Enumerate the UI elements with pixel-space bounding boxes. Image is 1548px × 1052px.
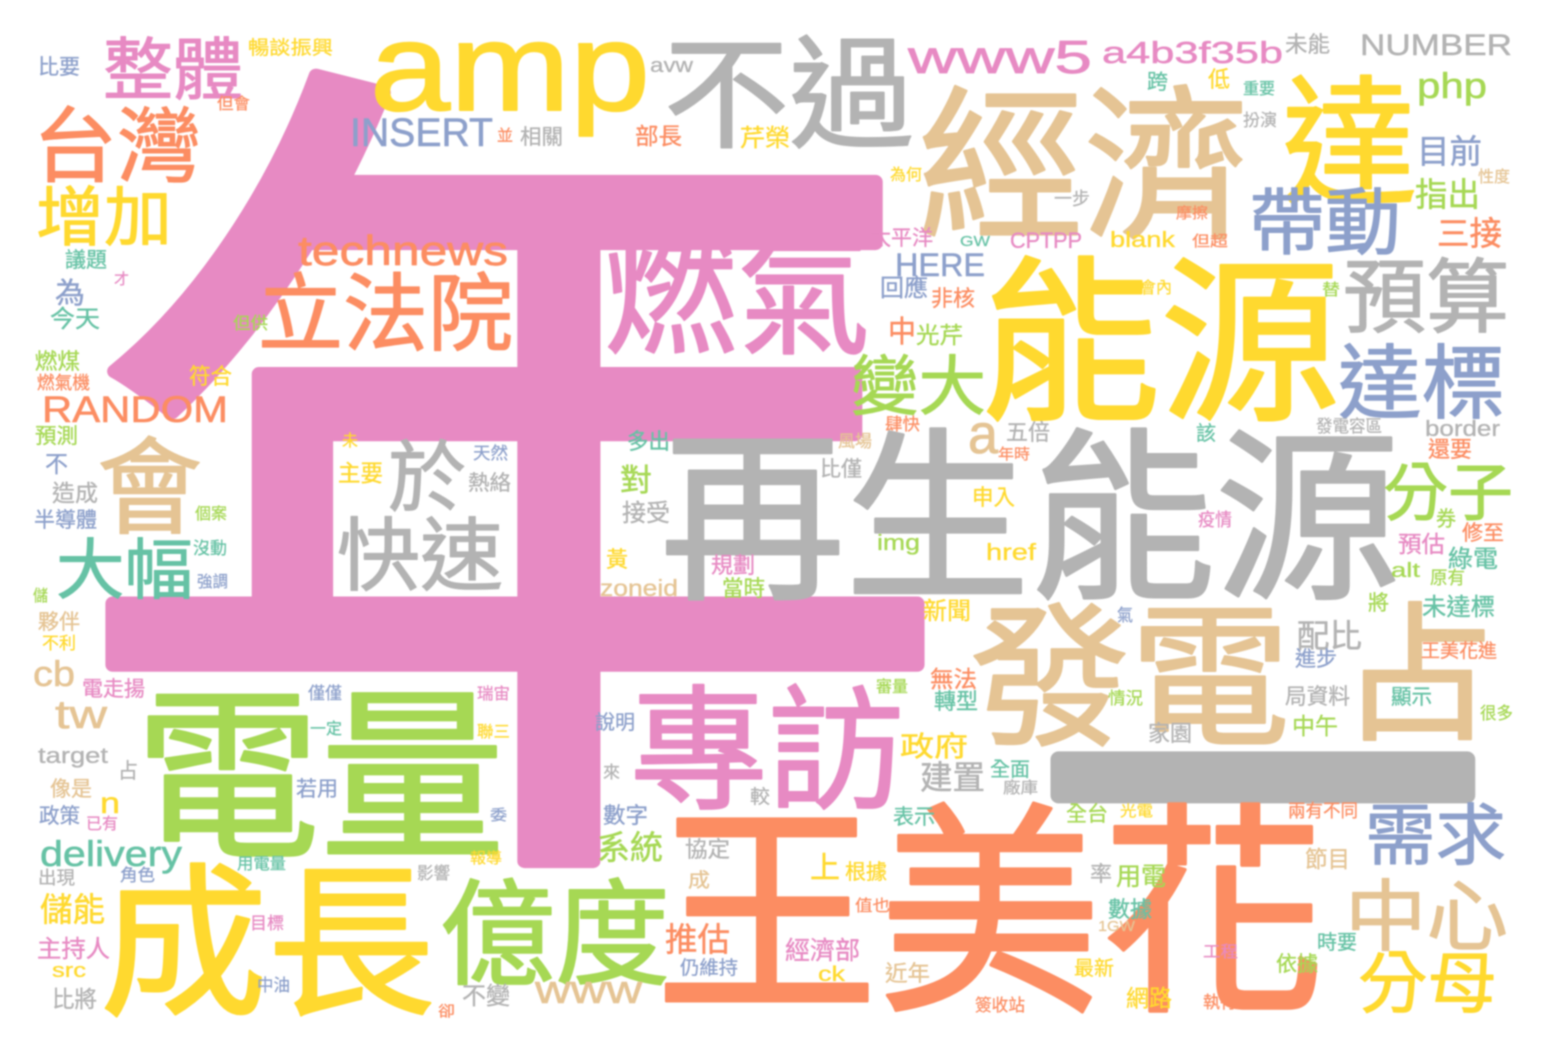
small words: top right: 低 [1208, 67, 1230, 92]
small words: centre bottom: 瑞宙 [477, 685, 510, 703]
small words: inside 年 counters: 接受 [622, 500, 670, 527]
small words: centre upper: 太平洋 [870, 227, 933, 250]
small words: left lower column: 出現 [38, 868, 75, 888]
small words: bottom right: 率 [1090, 863, 1112, 886]
small words: left lower column: 主持人 [37, 936, 110, 963]
small words: bottom right: 值也 [855, 897, 890, 915]
word: www: www [534, 968, 642, 1012]
small words: left middle column: 不利 [42, 634, 76, 653]
small words: top right: 三接 [1437, 215, 1502, 252]
small words: centre upper: 並 [497, 127, 513, 145]
small words: centre upper: 部長 [635, 123, 682, 149]
small words: centre right: 政府 [900, 731, 968, 762]
small words: inside 年 counters: 未 [342, 432, 358, 450]
small words: left upper column: 為 [55, 277, 85, 310]
word: 分母: 分母 [1358, 947, 1497, 1022]
small words: left lower column [37, 743, 290, 1012]
small words: inside 年 counters: 對 [620, 463, 652, 498]
small words: left upper column: 符合 [189, 364, 232, 389]
word: technews: technews [298, 227, 508, 274]
small words: centre upper: avw [650, 55, 694, 77]
small words: left middle column: 夥伴 [38, 611, 80, 634]
small words: top right: 重要 [1243, 80, 1275, 98]
small words: right column: 配比 [1297, 618, 1362, 654]
small words: centre upper: 為何 [890, 166, 922, 184]
small words: right column: 很多 [1480, 704, 1513, 723]
small words: right column: 王美花進 [1421, 640, 1497, 662]
word: 變大: 變大 [851, 350, 986, 423]
small words: left middle column: cb [33, 653, 75, 694]
small words: left upper column: 議題 [65, 249, 107, 272]
small words: centre upper: GW [960, 233, 991, 250]
giant word: 年: 年 [70, 25, 958, 974]
small words: bottom right: 工程 [1203, 943, 1238, 961]
small words: bottom right: 表示 [893, 806, 935, 829]
small words: bottom right: 1GW [1098, 918, 1136, 935]
small words: inside 年 counters: 規劃 [711, 553, 755, 578]
small words: left middle column: 強調 [197, 573, 228, 591]
small words: centre right: 情況 [1108, 689, 1143, 708]
small words: centre right: 五倍 [1006, 420, 1050, 445]
small words: right column: 未達標 [1422, 594, 1495, 621]
word: 占: 占 [1340, 592, 1495, 760]
small words: left middle column: 電走揚 [82, 678, 145, 701]
small words: top right: 目前 [1417, 133, 1482, 170]
word: 會: 會 [97, 431, 202, 548]
small words: top right: 未能 [1285, 32, 1330, 57]
small words: centre right: 轉型 [934, 689, 978, 714]
small words: top right: blank [1110, 227, 1176, 252]
small words: centre upper [497, 55, 1090, 349]
small words: left lower column: n [100, 787, 120, 820]
small words: centre upper: 相關 [520, 126, 563, 149]
small words: right column: 原有 [1430, 568, 1465, 588]
small words: centre right [820, 415, 1232, 797]
word: 專訪: 專訪 [630, 676, 905, 827]
small words: right column: 預估 [1398, 531, 1445, 557]
word: 達標: 達標 [1338, 340, 1505, 430]
small words: right column: 發電容區 [1316, 417, 1382, 436]
small words: left lower column: 儲能 [40, 891, 105, 928]
small words: centre right: 風場 [838, 432, 872, 451]
small words: bottom right: 經濟部 [785, 937, 860, 965]
small words: centre right: 無法 [930, 666, 977, 692]
word: a: a [968, 402, 999, 465]
small words: inside 年 counters [338, 429, 765, 601]
small words: centre right: 年時 [998, 446, 1030, 463]
small words: left lower column: target [38, 743, 108, 768]
small words: centre right: 建置 [920, 759, 985, 796]
small words: left upper column: 但供 [233, 314, 268, 333]
small words: inside 年 counters: zoneid [600, 575, 678, 601]
small words: bottom right: 根據 [845, 861, 887, 884]
small words: left middle column: 個案 [195, 505, 227, 523]
word: 成長: 成長 [100, 853, 435, 1037]
small words: right column: 修至 [1462, 522, 1504, 545]
small words: left upper column: 燃氣機 [37, 373, 90, 393]
small words: left upper column: 暢談振興 [248, 37, 333, 59]
small words: centre upper: 回應 [880, 275, 928, 302]
small words: inside 年 counters: 熱絡 [468, 472, 511, 495]
word: 王美花: 王美花 [655, 789, 1325, 1041]
small words: bottom right: 上 [810, 852, 840, 885]
word: 需求: 需求 [1365, 799, 1506, 874]
small words: bottom right: 兩有不同 [1288, 801, 1358, 821]
small words: bottom right: ck [818, 963, 846, 986]
small words: centre upper: 中 [888, 316, 916, 349]
small words: centre right: 疫情 [1198, 510, 1232, 530]
small words: bottom right: 依據 [1276, 953, 1318, 976]
small words: top right: 會內 [1140, 279, 1172, 297]
small words: top right: 但超 [1192, 233, 1228, 250]
word: 大幅: 大幅 [56, 533, 193, 607]
small words: centre bottom: 較 [750, 786, 770, 808]
small words: centre upper: HERE [895, 247, 985, 283]
small words: inside 年 counters: 當時 [722, 576, 765, 601]
small words: bottom right: 網路 [1126, 985, 1172, 1011]
small words: centre bottom: 數字 [603, 803, 648, 828]
small words: centre right: 審量 [876, 678, 908, 696]
small words: bottom right: 近年 [885, 961, 930, 986]
small words: left lower column: 比將 [52, 986, 97, 1012]
small words: left lower column: src [52, 960, 86, 982]
small words: centre right: 比僅 [820, 458, 862, 481]
small words: bottom right: 光電 [1120, 803, 1153, 820]
small words: inside 年 counters: 天然 [473, 444, 508, 463]
small words: centre upper: 一步 [1054, 189, 1090, 209]
small words: bottom right: 全台 [1066, 803, 1108, 826]
small words: centre right: 氣 [1117, 606, 1133, 625]
word: www5: www5 [907, 31, 1092, 83]
small words: centre upper: 非核 [931, 286, 975, 311]
small words: centre bottom: 仍維持 [680, 957, 738, 979]
small words: centre bottom: 說明 [595, 711, 635, 734]
small words: right column: 券 [1436, 508, 1456, 531]
word: 台灣: 台灣 [33, 102, 201, 193]
word: 電量: 電量 [135, 677, 505, 883]
word: 億度: 億度 [440, 872, 670, 1000]
small words: centre bottom: 若用 [296, 778, 338, 801]
small words: top right: 指出 [1415, 176, 1480, 213]
small words: centre bottom: 報導 [470, 850, 502, 867]
small words: bottom right: 執行 [1203, 993, 1237, 1012]
word: 分子: 分子 [1383, 459, 1513, 529]
small words: centre upper: CPTPP [1010, 228, 1082, 253]
small words: centre bottom: 來 [603, 763, 620, 782]
word: 發電: 發電 [970, 593, 1290, 766]
small words: bottom right: 簽收站 [975, 995, 1025, 1015]
small words: bottom right: 最新 [1074, 957, 1114, 980]
word: 立法院: 立法院 [258, 268, 513, 363]
word: 增加: 增加 [36, 181, 172, 254]
word: 再生能源: 再生能源 [660, 418, 1400, 624]
small words: centre right: 申入 [972, 485, 1015, 510]
small words: left lower column: 中油 [257, 976, 290, 995]
small words: centre bottom: 影響 [417, 864, 450, 883]
small words: centre right: 肆快 [885, 415, 920, 434]
small words: left upper column: 但會 [217, 95, 250, 113]
small words: right column: border [1425, 416, 1500, 441]
small words: right column: 中午 [1292, 713, 1338, 739]
small words: centre right: href [986, 539, 1037, 565]
small words: left lower column: 政策 [39, 805, 80, 828]
word: 帶動: 帶動 [1249, 183, 1401, 264]
word: amp: amp [370, 0, 650, 137]
small words: left middle column: 沒動 [193, 539, 227, 558]
small words: right column: 局資料 [1285, 684, 1350, 709]
word: 經濟: 經濟 [918, 76, 1250, 260]
small words: left middle column: 造成 [52, 480, 98, 506]
small words: right column [1148, 416, 1513, 746]
small words: top right: 跨 [1147, 71, 1168, 94]
word: 預算: 預算 [1343, 254, 1509, 344]
small words: right column: 將 [1368, 592, 1389, 615]
small words: left lower column: 已有 [86, 815, 118, 833]
small words: centre bottom: 一定 [310, 720, 342, 738]
small words: right column: 家園 [1148, 721, 1192, 746]
word: 不過: 不過 [664, 28, 914, 164]
small words: left middle column [33, 425, 228, 737]
small words: top right: php [1417, 65, 1487, 106]
small words: left lower column: 像是 [50, 778, 92, 801]
small words: centre bottom: 僅僅 [308, 684, 342, 703]
small words: left middle column: 儲 [33, 587, 48, 605]
small words: top right: 摩擦 [1176, 204, 1208, 222]
small words: left upper column: 燃煤 [35, 349, 80, 374]
word: delivery: delivery [40, 833, 182, 874]
small words: left upper column [35, 37, 333, 393]
small words: bottom right: 時要 [1317, 931, 1357, 954]
small words: centre upper: 光芹 [916, 322, 963, 348]
small words: left middle column: 預測 [35, 425, 78, 448]
small words: left middle column: 半導體 [34, 509, 97, 532]
word: RANDOM: RANDOM [42, 389, 228, 430]
small words: inside 年 counters: 主要 [338, 460, 383, 486]
word: 於: 於 [388, 434, 466, 522]
small words: centre upper: 芹榮 [740, 125, 790, 152]
small words: left middle column: tw [55, 693, 107, 737]
word: 整體: 整體 [103, 33, 243, 109]
small words: left lower column: 目標 [250, 914, 284, 933]
small words: centre right: 全面 [990, 759, 1030, 781]
small words: centre right: img [877, 530, 920, 555]
small words: centre right: 廠庫 [1003, 778, 1038, 797]
small words: centre bottom: 不變 [462, 983, 510, 1010]
word: 中心: 中心 [1345, 873, 1508, 961]
small words: centre bottom: 成 [688, 869, 710, 892]
small words: right column: 綠電 [1448, 546, 1498, 573]
small words: top right: 性度 [1478, 168, 1510, 186]
small words: bottom right [785, 801, 1358, 1015]
small words: bottom right: 數據 [1108, 897, 1152, 922]
small words: left middle column: 不 [45, 451, 68, 477]
word: a4b3f35b: a4b3f35b [1102, 35, 1283, 70]
small words: centre bottom: 卻 [438, 1003, 455, 1020]
small words: left upper column: 今天 [50, 306, 100, 333]
small words: left lower column: 角色 [120, 866, 155, 885]
small words: centre bottom: 推估 [665, 921, 730, 958]
word: 能源: 能源 [980, 245, 1340, 444]
small words: top right: 扮演 [1243, 111, 1277, 130]
small words: inside 年 counters: 黃 [606, 547, 628, 572]
small words: left upper column: 才 [114, 271, 129, 288]
word: 快速: 快速 [337, 512, 503, 601]
small words: centre bottom: 委 [490, 807, 507, 824]
small words: centre bottom: 聯三 [477, 723, 510, 741]
small words: left lower column: 占 [118, 760, 138, 783]
small words: top right: 替 [1322, 281, 1340, 299]
small words: centre bottom [296, 684, 770, 1020]
word: INSERT: INSERT [350, 111, 493, 155]
word: NUMBER: NUMBER [1360, 29, 1512, 62]
small words: centre right: 新聞 [923, 598, 971, 625]
small words: left upper column: 比要 [38, 56, 80, 79]
small words: right column: 進步 [1295, 648, 1337, 671]
small words: right column: alt [1391, 560, 1421, 582]
small words: centre bottom: 系統 [597, 829, 663, 866]
small words: right column: 還要 [1428, 437, 1472, 462]
small words: bottom right: 用電 [1116, 863, 1166, 891]
word: 燃氣: 燃氣 [605, 221, 870, 372]
small words: left lower column: 用電量 [237, 856, 286, 873]
giant word: 一: 一 [1039, 552, 1485, 1043]
small words: centre right: 該 [1196, 422, 1216, 445]
small words: bottom right: 節目 [1305, 846, 1350, 872]
small words: inside 年 counters: 多出 [627, 429, 670, 454]
word: 達: 達 [1282, 66, 1417, 223]
small words: centre bottom: 協定 [685, 837, 730, 862]
small words: right column: 顯示 [1391, 686, 1432, 709]
small words: top right [1110, 32, 1510, 299]
